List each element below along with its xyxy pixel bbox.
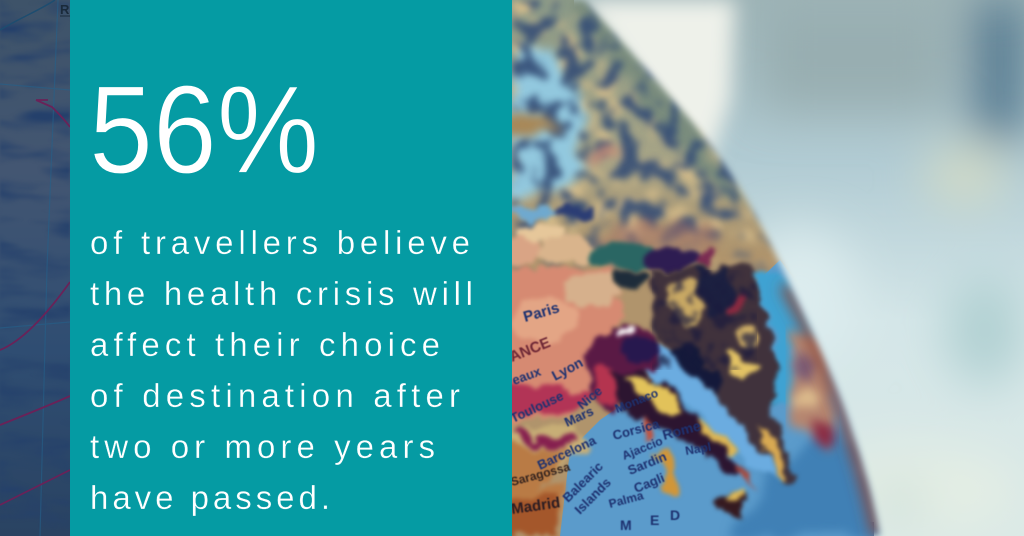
map labels: Islands — [572, 475, 614, 517]
Adriatic sea — [640, 345, 778, 482]
description text: two or more years — [90, 428, 435, 465]
islands — [645, 421, 654, 440]
globe — [490, 0, 900, 536]
eastern coast land — [790, 335, 835, 450]
mottled land detail — [512, 0, 757, 264]
map labels: Cagli — [632, 470, 667, 496]
left map photo strip — [0, 0, 70, 536]
map labels: Corsica — [611, 416, 662, 443]
map labels: Barcelona — [535, 432, 599, 473]
globe rim — [785, 285, 878, 536]
red route lines on the map — [0, 100, 70, 505]
Alps and Italy — [585, 268, 760, 520]
map labels: Lyon — [549, 354, 585, 384]
map labels: Ajaccio — [620, 434, 665, 463]
map labels: Monaco — [613, 386, 660, 416]
blurred background photo — [512, 0, 1024, 536]
map labels: eaux — [510, 363, 544, 388]
map labels: D — [670, 507, 680, 523]
dark speckle over the in-focus land — [652, 270, 757, 370]
map labels: E — [650, 512, 659, 528]
description text: have passed. — [90, 479, 330, 516]
map labels: Madrid — [510, 494, 561, 518]
map labels: Rome — [661, 417, 703, 443]
map labels: Nice — [574, 383, 605, 412]
top of globe, heavily out of focus — [512, 0, 772, 272]
description text — [90, 224, 473, 516]
description text: of travellers believe — [90, 224, 470, 261]
sea base — [560, 260, 900, 536]
map labels: Palma — [607, 488, 645, 511]
Balkans and central Europe — [650, 264, 798, 482]
upper Europe band — [502, 204, 715, 269]
map letter fragment: R — [60, 2, 70, 17]
map labels: Paris — [521, 299, 561, 326]
description text: the health crisis will — [90, 275, 473, 312]
map labels — [507, 299, 712, 533]
France and Spain land — [512, 264, 626, 536]
headline statistic: 56% — [89, 61, 319, 200]
description text: of destination after — [90, 377, 460, 414]
map labels: M — [620, 517, 632, 533]
map labels: Napl — [684, 440, 712, 458]
map labels: Balearic — [560, 459, 606, 505]
teal panel — [70, 0, 512, 536]
map labels: Toulouse — [508, 388, 566, 426]
map labels: Sardin — [626, 449, 669, 478]
map labels: Saragossa — [509, 460, 572, 489]
description text: affect their choice — [90, 326, 440, 363]
map labels: ANCE — [507, 334, 553, 366]
map labels: Mars — [562, 403, 596, 430]
map grid lines — [0, 0, 70, 536]
Aegean sea — [750, 268, 808, 406]
